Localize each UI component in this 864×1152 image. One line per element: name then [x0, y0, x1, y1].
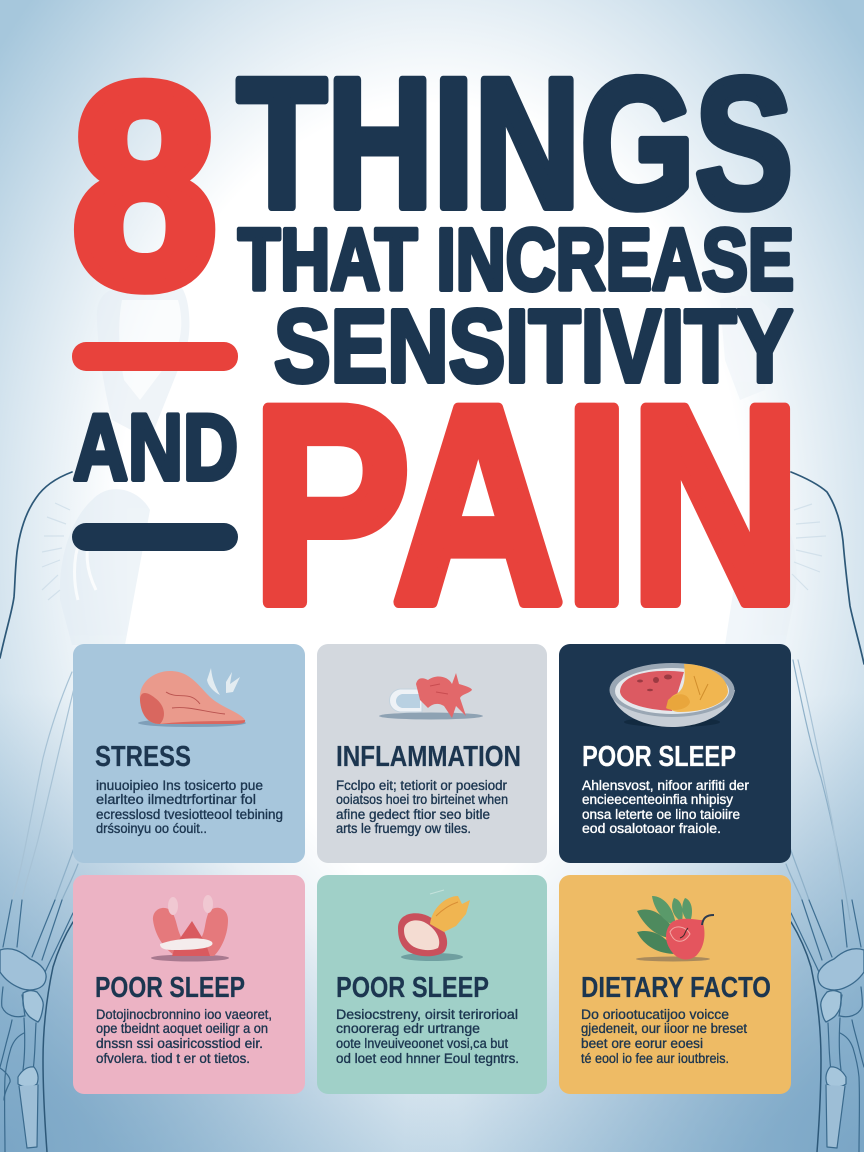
icon: food bowl: [610, 663, 735, 727]
body text: poor sleep: [582, 778, 750, 836]
body text: stress: ecresslosd tvesiotteool tebining: [96, 807, 283, 822]
heading: poor sleep: POOR SLEEP: [95, 972, 245, 1004]
heading: poor sleep: POOR SLEEP: [336, 972, 489, 1004]
panel: poor sleep (teal): [317, 875, 547, 1094]
heading: stress: STRESS: [95, 741, 191, 773]
heading: dietary facto: DIETARY FACTO: [581, 972, 771, 1004]
body text: poor sleep: [336, 1007, 519, 1066]
body text: poor sleep: od loet eod hnner Eoul tegntrs.: [336, 1051, 519, 1066]
body text: poor sleep: onsa leterte oe lino taioiire: [582, 807, 740, 822]
title: 8: 8: [72, 25, 217, 346]
body text: stress: inuuoipieo Ins tosicerto pue: [96, 778, 263, 793]
left arm outline and bones: [0, 472, 78, 1152]
body text: poor sleep: dnssn ssi oasiricosstiod eir.: [96, 1036, 263, 1051]
body text: inflammation: [336, 778, 508, 836]
right arm outline and bones: [786, 472, 864, 1152]
body text: poor sleep: ofvolera. tiod t er ot tietos.: [96, 1051, 250, 1066]
body text: inflammation: afine gedect ftior seo bitle: [336, 807, 490, 822]
body text: dietary: Do oriootucatijoo voicce: [581, 1007, 729, 1022]
icon: apple with leaves: [636, 896, 714, 962]
body text: inflammation: Fcclpo eit; tetiorit or poesiodr: [336, 778, 507, 793]
body text: poor sleep: Desiocstreny, oirsit terirorioal: [336, 1007, 518, 1022]
navy divider bar: [72, 523, 238, 551]
body text: inflammation: arts le fruemgy ow tiles.: [336, 821, 471, 836]
icon: joint with leaf: [398, 890, 470, 961]
heading: inflammation: INFLAMMATION: [336, 741, 521, 773]
icon: inflamed joint: [379, 673, 483, 720]
body text: poor sleep: eod osalotoaor fraiole.: [582, 821, 721, 836]
body text: dietary: [581, 1007, 747, 1066]
heading: poor sleep: POOR SLEEP: [582, 741, 736, 773]
body text: inflammation: ooiatsos hoei tro birteinet when: [336, 792, 508, 807]
body text: dietary: gjedeneit, our iioor ne breset: [581, 1021, 747, 1036]
body text: stress: [96, 778, 283, 836]
body text: poor sleep: encieecenteoinfia nhipisy: [582, 792, 733, 807]
faint anatomical torso illustration, left: [42, 288, 189, 645]
body text: stress: drśsoinyu oo ćouit..: [96, 821, 207, 836]
body text: poor sleep: ope tbeidnt aoquet oeiligr a on: [96, 1021, 268, 1036]
panel: stress: [73, 644, 305, 863]
icon: inflamed organs: [151, 895, 229, 962]
faint anatomical torso illustration, right: [720, 296, 826, 645]
body text: poor sleep: cnoorerag edr urtrange: [336, 1021, 480, 1036]
body text: dietary: té eool io fee aur ioutbreis.: [581, 1051, 729, 1066]
panel: dietary factors: [559, 875, 791, 1094]
red divider bar: [72, 342, 238, 371]
panel: poor sleep (pink): [73, 875, 305, 1094]
panel: poor sleep (navy): [559, 644, 791, 863]
panel: inflammation: [317, 644, 547, 863]
title: AND: AND: [73, 394, 238, 500]
body text: poor sleep: Dotojinocbronnino ioo vaeoret,: [96, 1007, 272, 1022]
body text: poor sleep: oote lnveuiveoonet vosi,ca but: [336, 1036, 508, 1051]
body text: dietary: beet ore eorur eoesi: [581, 1036, 703, 1051]
icon: strained muscle: [138, 668, 246, 727]
body text: poor sleep: [96, 1007, 272, 1066]
body text: stress: elarlteo ilmedtrfortinar fol: [96, 792, 256, 807]
body text: poor sleep: Ahlensvost, nifoor arifiti der: [582, 778, 750, 793]
